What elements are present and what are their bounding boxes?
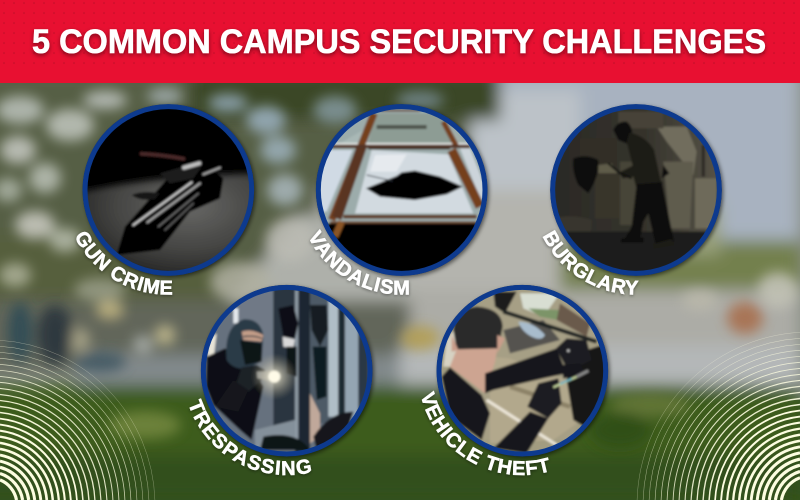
photo: thief picking a car lock — [433, 280, 613, 460]
panel: burglary — [542, 103, 726, 298]
photo: burglar in dark room — [547, 102, 727, 278]
panel: gun crime — [75, 104, 258, 297]
label: burglary: BURGLARY — [542, 230, 640, 298]
panel: vandalism — [308, 104, 492, 298]
label: vehicle theft: VEHICLE THEFT — [421, 390, 549, 478]
panel: vehicle theft — [421, 284, 612, 478]
header banner — [0, 0, 800, 83]
label: vandalism: VANDALISM — [308, 229, 411, 298]
label: trespassing: TRESPASSING — [189, 398, 312, 477]
concentric ring decoration bottom right — [637, 332, 800, 500]
concentric ring decoration bottom left — [0, 340, 155, 500]
photo: masked intruder with flashlight — [197, 280, 377, 460]
title: 5 COMMON CAMPUS SECURITY CHALLENGES — [32, 23, 766, 61]
label: gun crime: GUN CRIME — [75, 232, 173, 297]
photo: handgun on dark surface — [80, 102, 260, 282]
photo: broken window — [313, 102, 490, 278]
panel: trespassing — [189, 284, 376, 477]
